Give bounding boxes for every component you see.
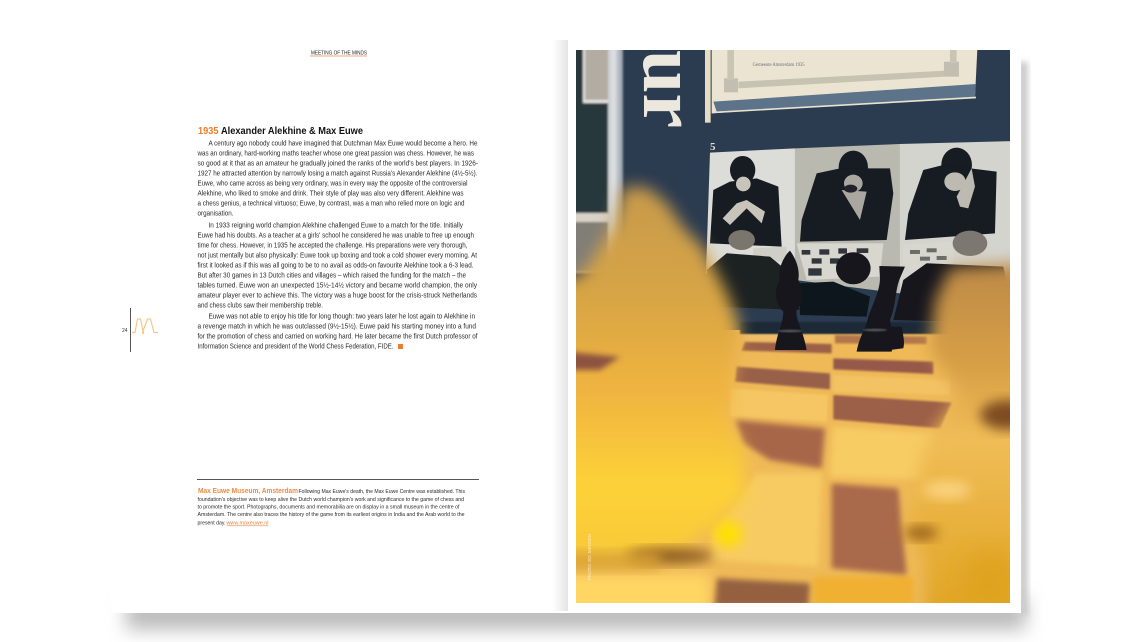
sidebar text: www.maxeuwe.nl xyxy=(226,520,268,526)
end mark square xyxy=(398,344,403,349)
page shadow xyxy=(126,62,1028,630)
sidebar text xyxy=(198,486,465,526)
article body text: so good at it that as an amateur he gradually joined the ranks of the world's best players. In 1926- xyxy=(198,160,479,168)
framed certificate: Gemeente Amsterdam 1935 xyxy=(753,63,805,68)
player one xyxy=(710,156,782,247)
blurred foreground piece left xyxy=(576,175,752,557)
article body text: was an ordinary, hard-working maths teacher whose one great passion was chess. However, he was xyxy=(197,150,474,158)
article body text: Euwe was not able to enjoy his title for long though: two years later he lost again to Alekhine in xyxy=(208,314,475,320)
wall lettering: ur xyxy=(627,50,714,128)
piece two xyxy=(857,266,905,352)
article body text: not just mentally but also physically: Euwe took up boxing and took a cold shower every morning. At xyxy=(198,252,477,260)
panel: right page xyxy=(568,40,1021,613)
article body text: organisation. xyxy=(198,210,234,218)
player three xyxy=(905,148,997,240)
article heading: Alexander Alekhine & Max Euwe xyxy=(221,126,363,137)
article body text: first it looked as if this was all going to be to no avail as odds-on favourite Alekhine took a 6-3 lead. xyxy=(198,262,474,270)
left doorway and pillar xyxy=(576,50,624,274)
exhibit number: 5 xyxy=(710,141,716,153)
article body text: and chess clubs saw their membership treble. xyxy=(198,302,323,310)
article body text: A century ago nobody could have imagined that Dutchman Max Euwe would become a hero. He xyxy=(208,140,478,148)
article body text: Information Science and president of the World Chess Federation, FIDE. xyxy=(198,344,394,350)
wall xyxy=(576,50,1010,350)
foreground heads xyxy=(707,230,1017,323)
sidebar text: Max Euwe Museum, Amsterdam xyxy=(198,486,298,495)
page number and logo: 24 xyxy=(122,328,128,334)
black chess pieces xyxy=(775,251,905,352)
sidebar rule xyxy=(197,479,479,480)
article body text: amateur player ever to achieve this. The victory was a huge boost for the crisis-struck Netherlands xyxy=(198,292,477,300)
framed certificate xyxy=(705,50,977,123)
dark board square seen through blur xyxy=(570,352,620,370)
piece three xyxy=(890,327,904,350)
article body text: a revenge match in which he was outclassed (9½-15½). Euwe paid his starting money into a fund xyxy=(198,322,476,330)
panel: left page xyxy=(111,40,568,613)
photo credit: PHOTO: ED. MENSEN xyxy=(587,534,592,580)
article body text: Alekhine, who liked to smoke and drink. Their style of play was also very different. Alekhine was xyxy=(198,190,464,198)
chess boards in photo xyxy=(797,243,883,280)
blurred foreground piece right xyxy=(906,252,1010,603)
sidebar text: present day. xyxy=(198,520,226,526)
article body text: But after 30 games in 13 Dutch cities and villages – which raised the funding for the match – the xyxy=(198,272,466,280)
article body text: time for chess. However, in 1935 he accepted the challenge. His preparations were very thorough, xyxy=(198,242,468,250)
article body text: Euwe, who came across as being very ordinary, was in every way the opposite of the controversial xyxy=(198,180,468,188)
chess board xyxy=(576,330,969,603)
blurred highlights and shadows xyxy=(560,521,742,614)
sidebar text: Following Max Euwe's death, the Max Euwe Centre was established. This xyxy=(298,489,465,495)
piece one xyxy=(775,251,807,350)
article body text: Euwe had his doubts. As a teacher at a girls' school he considered he was unable to free up enough xyxy=(198,232,474,240)
navy band behind board edge xyxy=(739,322,946,335)
photo: chess board with exhibition wall xyxy=(576,50,1010,603)
sidebar text: to promote the sport. Photographs, documents and memorabilia are on display in a small museum in the centre of xyxy=(198,504,460,510)
player two xyxy=(800,151,893,242)
page number and logo xyxy=(122,308,158,352)
article body text: for the promotion of chess and carried on working hard. He later became the first Dutch professor of xyxy=(198,334,478,340)
article body text xyxy=(197,140,479,350)
article body text: 1927 he attracted attention by narrowly losing a match against Russia's Alexander Alekhine (4½-5½). xyxy=(198,170,478,178)
article body text: tables turned. Euwe won an unexpected 15½-14½ victory and became world champion, the only xyxy=(198,282,477,290)
article body text: In 1933 reigning world champion Alekhine challenged Euwe to a match for the title. Initially xyxy=(208,222,463,230)
sidebar text: foundation's objective was to keep alive the Dutch world champion's work and significance to the game of chess and xyxy=(198,497,464,503)
triptych photograph of players xyxy=(706,141,1017,323)
article heading: 1935 xyxy=(198,126,219,137)
sidebar text: Amsterdam. The centre also traces the history of the game from its earliest origins in India and the Arab world to the xyxy=(198,512,465,518)
spine shading xyxy=(552,40,568,611)
article body text: a chess genius, a technical virtuoso; Euwe, by contrast, was a man who relied more on logic and xyxy=(198,200,465,208)
running header: MEETING OF THE MINDS xyxy=(311,50,367,56)
